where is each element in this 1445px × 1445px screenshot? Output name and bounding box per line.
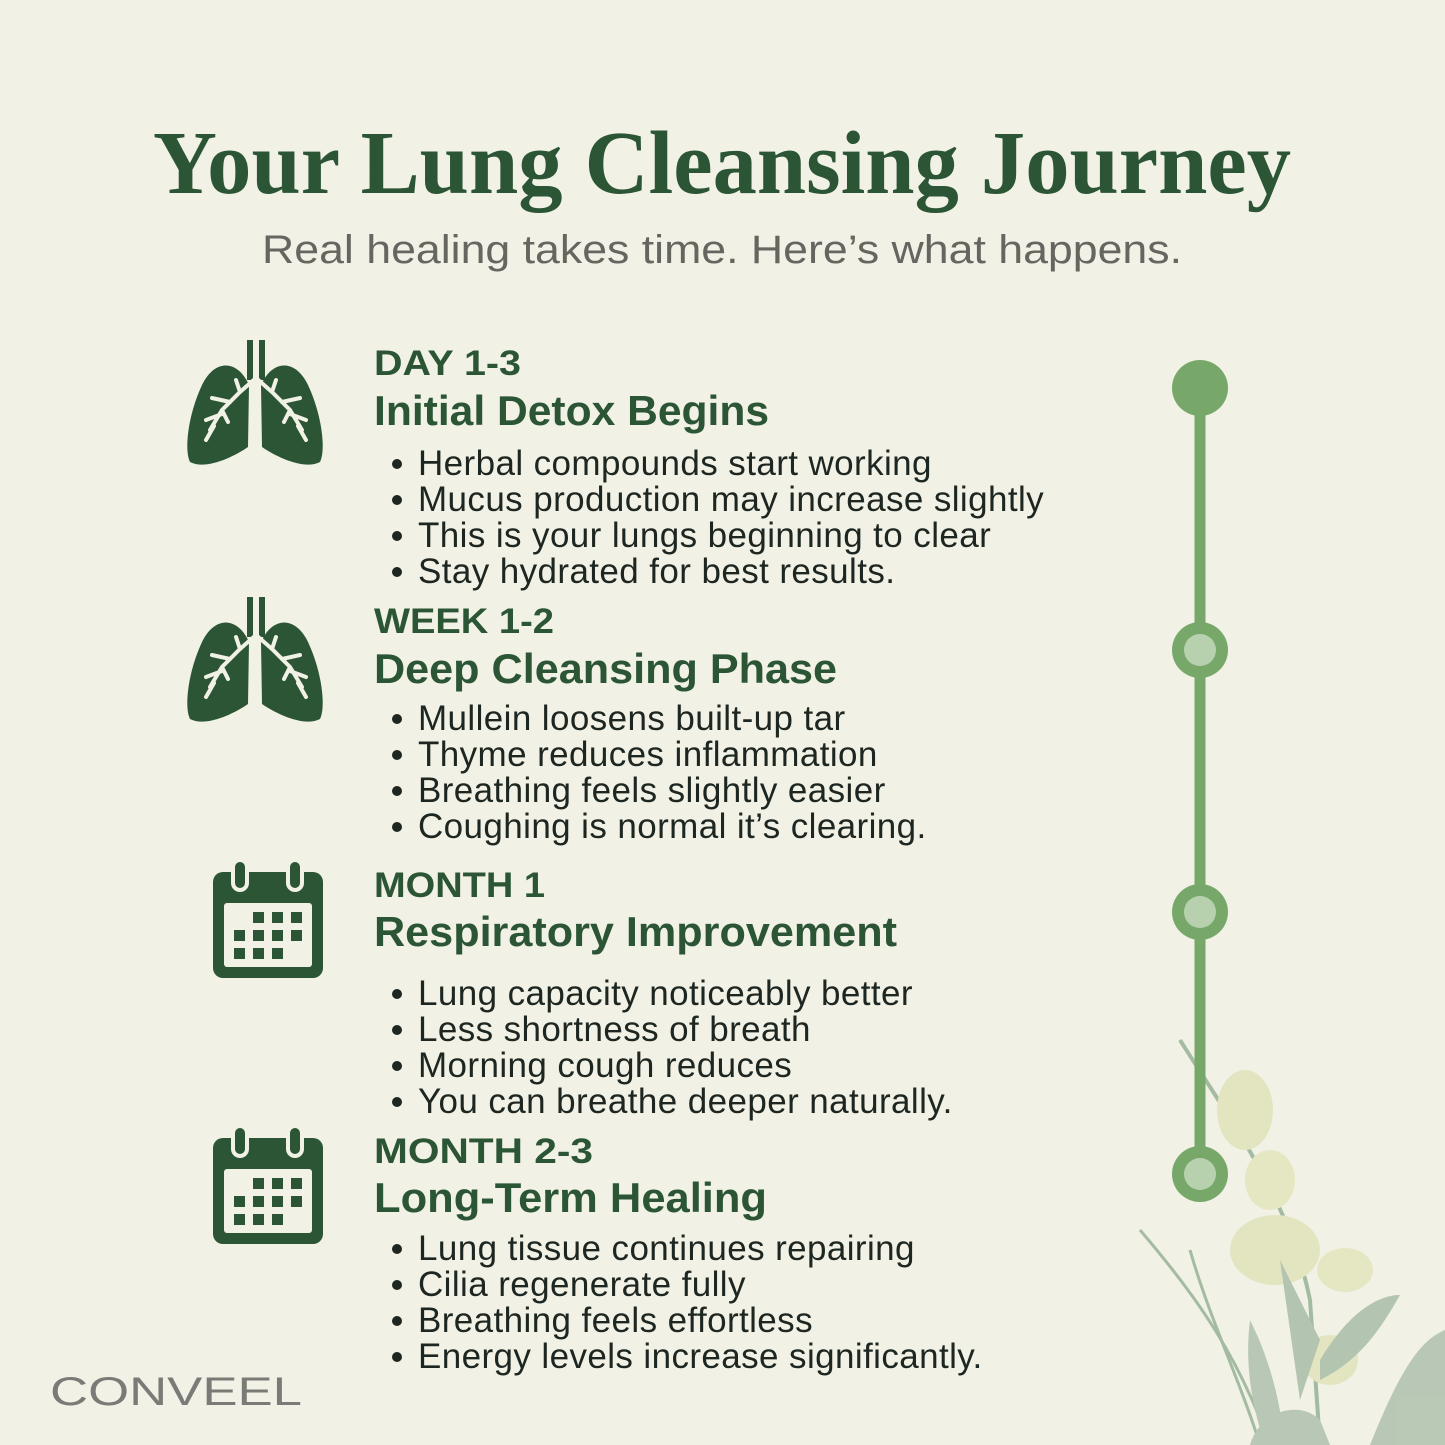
section: week 1-2: Thyme reduces inflammation (418, 735, 878, 774)
section: day 1-3: Mucus production may increase slightly (418, 480, 1044, 519)
section: month 2-3: Cilia regenerate fully (418, 1265, 746, 1304)
icon: lungs (187, 340, 323, 465)
subtitle: Real healing takes time. Here’s what happens. (262, 228, 1182, 272)
section: day 1-3: DAY 1-3 (374, 344, 521, 383)
section: month 1: MONTH 1 (374, 866, 545, 905)
icon: calendar (213, 860, 323, 978)
section: week 1-2: WEEK 1-2 (374, 602, 554, 641)
section: month 2-3: Breathing feels effortless (418, 1301, 813, 1340)
section: day 1-3: Initial Detox Begins (374, 387, 769, 434)
timeline (1172, 360, 1228, 1202)
section: week 1-2: Breathing feels slightly easier (418, 771, 886, 810)
section: month 1 (213, 860, 953, 1121)
section: month 1: Lung capacity noticeably better (418, 974, 913, 1013)
icon: lungs (187, 597, 323, 722)
logo: CONVEEL (50, 1370, 302, 1414)
section: day 1-3: This is your lungs beginning to clear (418, 516, 991, 555)
decorative plant (1140, 1040, 1445, 1445)
icon: calendar (213, 1126, 323, 1244)
title: Your Lung Cleansing Journey (153, 114, 1291, 213)
section: month 2-3 (213, 1126, 983, 1376)
section: week 1-2: Mullein loosens built-up tar (418, 699, 846, 738)
section: day 1-3 (187, 340, 1044, 591)
section: month 2-3: Lung tissue continues repairing (418, 1229, 915, 1268)
section: week 1-2: Coughing is normal it’s clearing. (418, 807, 927, 846)
section: month 1: Morning cough reduces (418, 1046, 792, 1085)
section: month 2-3: Long-Term Healing (374, 1174, 767, 1221)
section: month 2-3: Energy levels increase significantly. (418, 1337, 983, 1376)
section: month 1: Respiratory Improvement (374, 908, 897, 955)
section: day 1-3: Stay hydrated for best results. (418, 552, 895, 591)
section: month 1: You can breathe deeper naturally. (418, 1082, 953, 1121)
section: month 2-3: MONTH 2-3 (374, 1132, 593, 1171)
section: week 1-2 (187, 597, 927, 846)
section: month 1: Less shortness of breath (418, 1010, 811, 1049)
section: week 1-2: Deep Cleansing Phase (374, 645, 837, 692)
section: day 1-3: Herbal compounds start working (418, 444, 932, 483)
